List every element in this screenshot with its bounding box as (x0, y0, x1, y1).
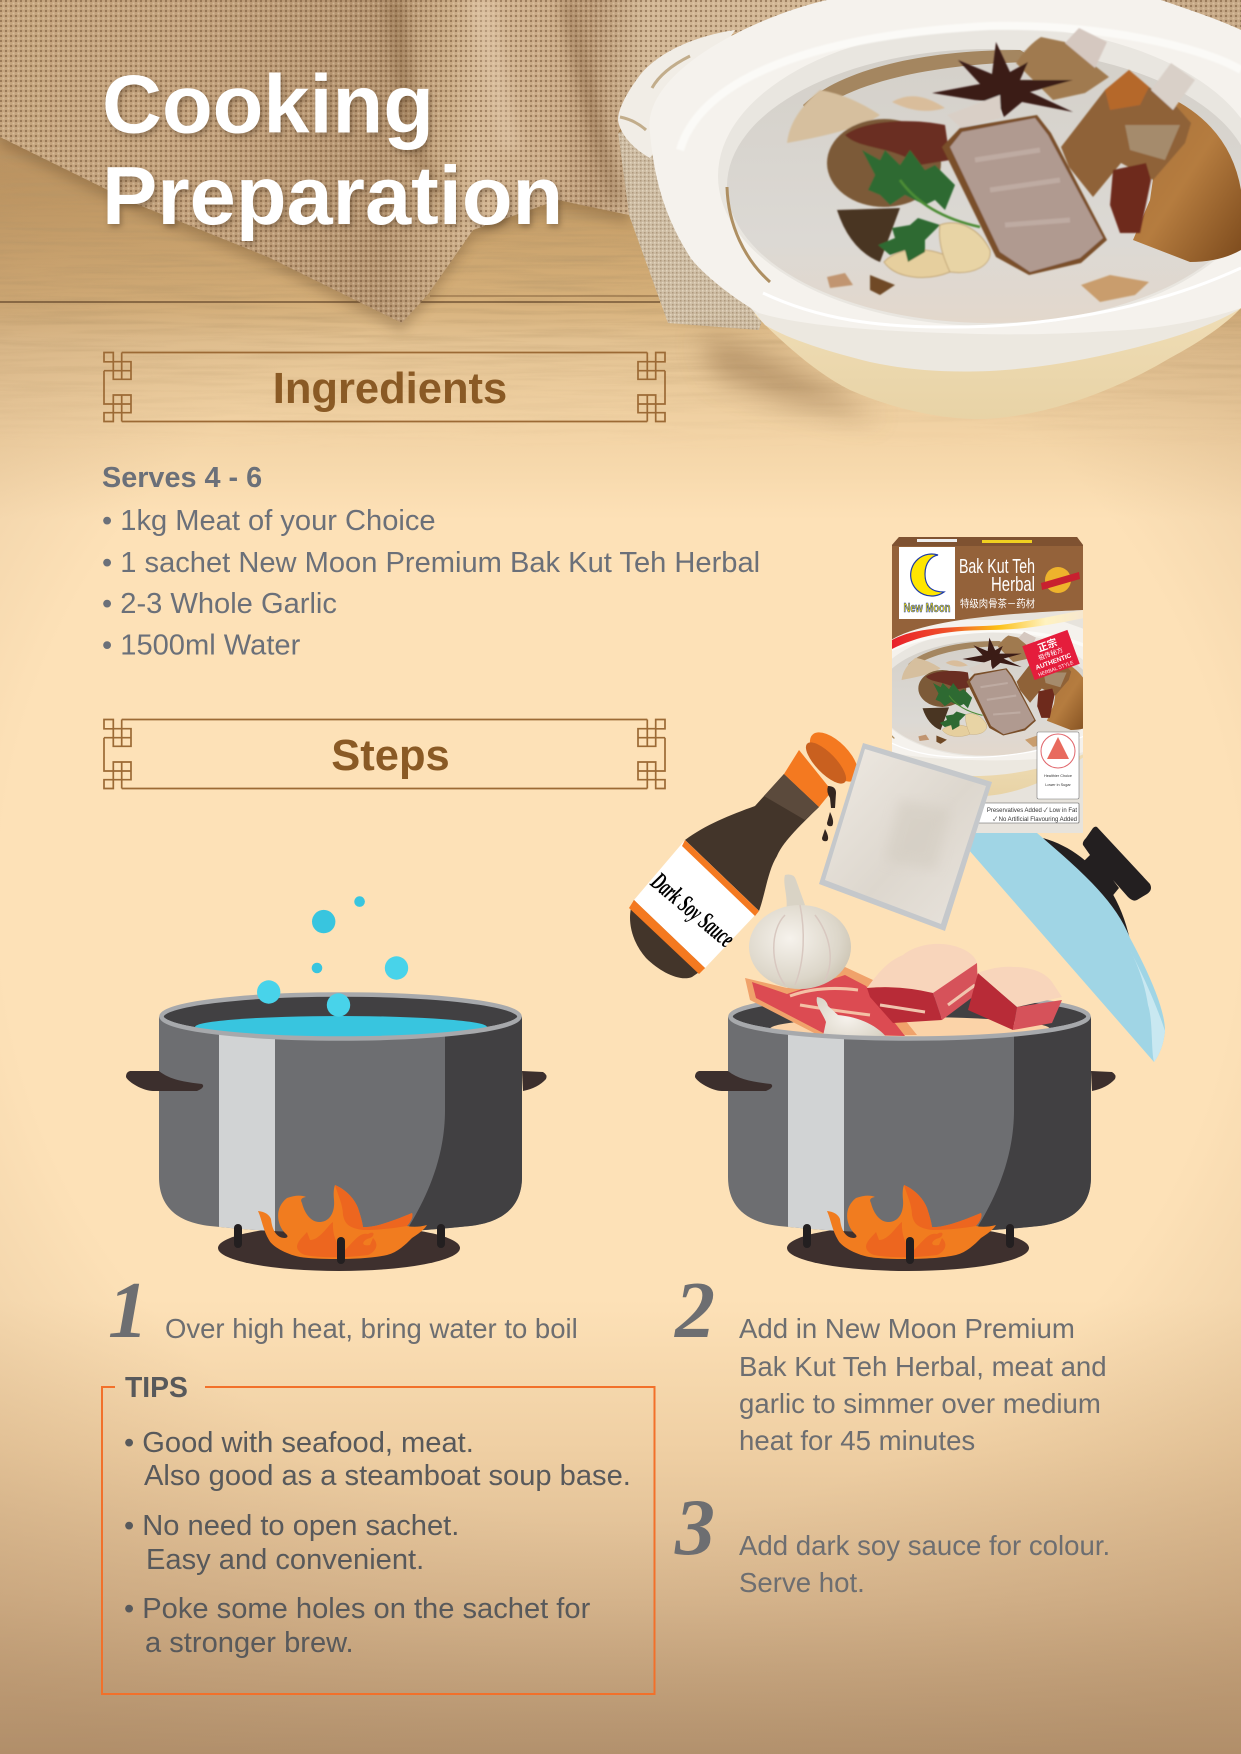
soup (727, 49, 1241, 323)
tips box: Easy and convenient. (146, 1544, 424, 1576)
heading: ingredients (104, 352, 665, 422)
illustration: pot with lid, ingredients, box and soy sauce (629, 537, 1165, 1271)
ingredients list (102, 462, 760, 662)
step 3: 3 (674, 1484, 715, 1572)
step 2 (674, 1267, 1107, 1456)
step 1: Over high heat, bring water to boil (165, 1313, 578, 1344)
step 2: garlic to simmer over medium (739, 1388, 1101, 1419)
step 3 (674, 1484, 1110, 1598)
claims strip: ✓ No Artificial Flavouring Added (993, 816, 1077, 823)
step 1 (108, 1267, 578, 1355)
photo on box (892, 620, 1083, 796)
ingredients list: Serves 4 - 6 (102, 462, 262, 494)
authentic stamp: AUTHENTIC (1035, 652, 1073, 672)
authentic stamp: 祖传秘方 (1037, 645, 1065, 662)
burlap cloth (0, 0, 1241, 331)
tips box: TIPS (125, 1371, 188, 1403)
bottle label text: Dark Soy Sauce (645, 866, 741, 953)
heading: ingredients: Ingredients (273, 365, 507, 413)
bowl rim (649, 0, 1241, 334)
soy sauce bottle (629, 724, 866, 978)
heading: steps (104, 720, 665, 788)
broth inside pot (770, 1017, 1050, 1036)
title (102, 58, 563, 242)
healthier choice badge: Healthier Choice (1044, 774, 1072, 778)
tips box: • Good with seafood, meat. (124, 1427, 474, 1459)
pork and herbs (787, 28, 1195, 302)
healthier choice badge (1037, 732, 1079, 799)
step 3: Serve hot. (739, 1567, 865, 1598)
claims strip: Preservatives Added ✓ Low in Fat (987, 807, 1077, 814)
pot lid (968, 827, 1165, 1062)
swoosh (892, 610, 1084, 649)
product name: 特级肉骨茶－药材 (960, 597, 1035, 610)
inner wall (718, 26, 1241, 326)
tips box: a stronger brew. (145, 1627, 354, 1659)
illustration: boiling water pot (126, 896, 547, 1271)
step 2: Add in New Moon Premium (739, 1313, 1075, 1344)
water (195, 1016, 487, 1038)
bubbles (257, 896, 408, 1017)
authentic stamp: 正宗 (1036, 636, 1059, 655)
whole garlic (749, 875, 851, 989)
white glaze band (744, 280, 1241, 372)
title: Cooking (102, 58, 434, 150)
product name (959, 556, 1035, 610)
clay bowl of bak kut teh (618, 0, 1241, 419)
step 2: heat for 45 minutes (739, 1425, 975, 1456)
ingredients list: • 1 sachet New Moon Premium Bak Kut Teh Herbal (102, 547, 760, 579)
product name: Herbal (991, 574, 1035, 596)
herbal sachet (819, 743, 992, 931)
authentic stamp (1022, 630, 1080, 680)
tips box: • No need to open sachet. (124, 1510, 459, 1542)
medal (1041, 567, 1080, 593)
heading: steps: Steps (331, 732, 450, 780)
ingredients list: • 1kg Meat of your Choice (102, 505, 436, 537)
ingredients list: • 2-3 Whole Garlic (102, 588, 337, 620)
step 2: 2 (674, 1267, 715, 1355)
claims strip (975, 803, 1079, 823)
bowl base (755, 250, 1241, 419)
logo: New Moon (904, 600, 951, 615)
tips box: • Poke some holes on the sachet for (124, 1593, 591, 1625)
authentic stamp: HERBAL STYLE (1038, 660, 1075, 678)
title: Preparation (102, 149, 563, 242)
meat (745, 944, 1062, 1036)
garlic in pot (817, 997, 893, 1050)
step 1: 1 (108, 1267, 148, 1355)
step 2: Bak Kut Teh Herbal, meat and (739, 1351, 1107, 1382)
logo (899, 547, 955, 619)
bowl shadow on table (700, 335, 880, 420)
tips box: Also good as a steamboat soup base. (144, 1460, 631, 1492)
product box (892, 537, 1083, 833)
tips box (102, 1371, 654, 1694)
product name: Bak Kut Teh (959, 556, 1035, 578)
side handle (618, 30, 735, 158)
healthier choice badge: Lower in Sugar (1045, 783, 1072, 787)
soy drips (822, 786, 836, 841)
step 3: Add dark soy sauce for colour. (739, 1530, 1110, 1561)
ingredients list: • 1500ml Water (102, 630, 301, 662)
